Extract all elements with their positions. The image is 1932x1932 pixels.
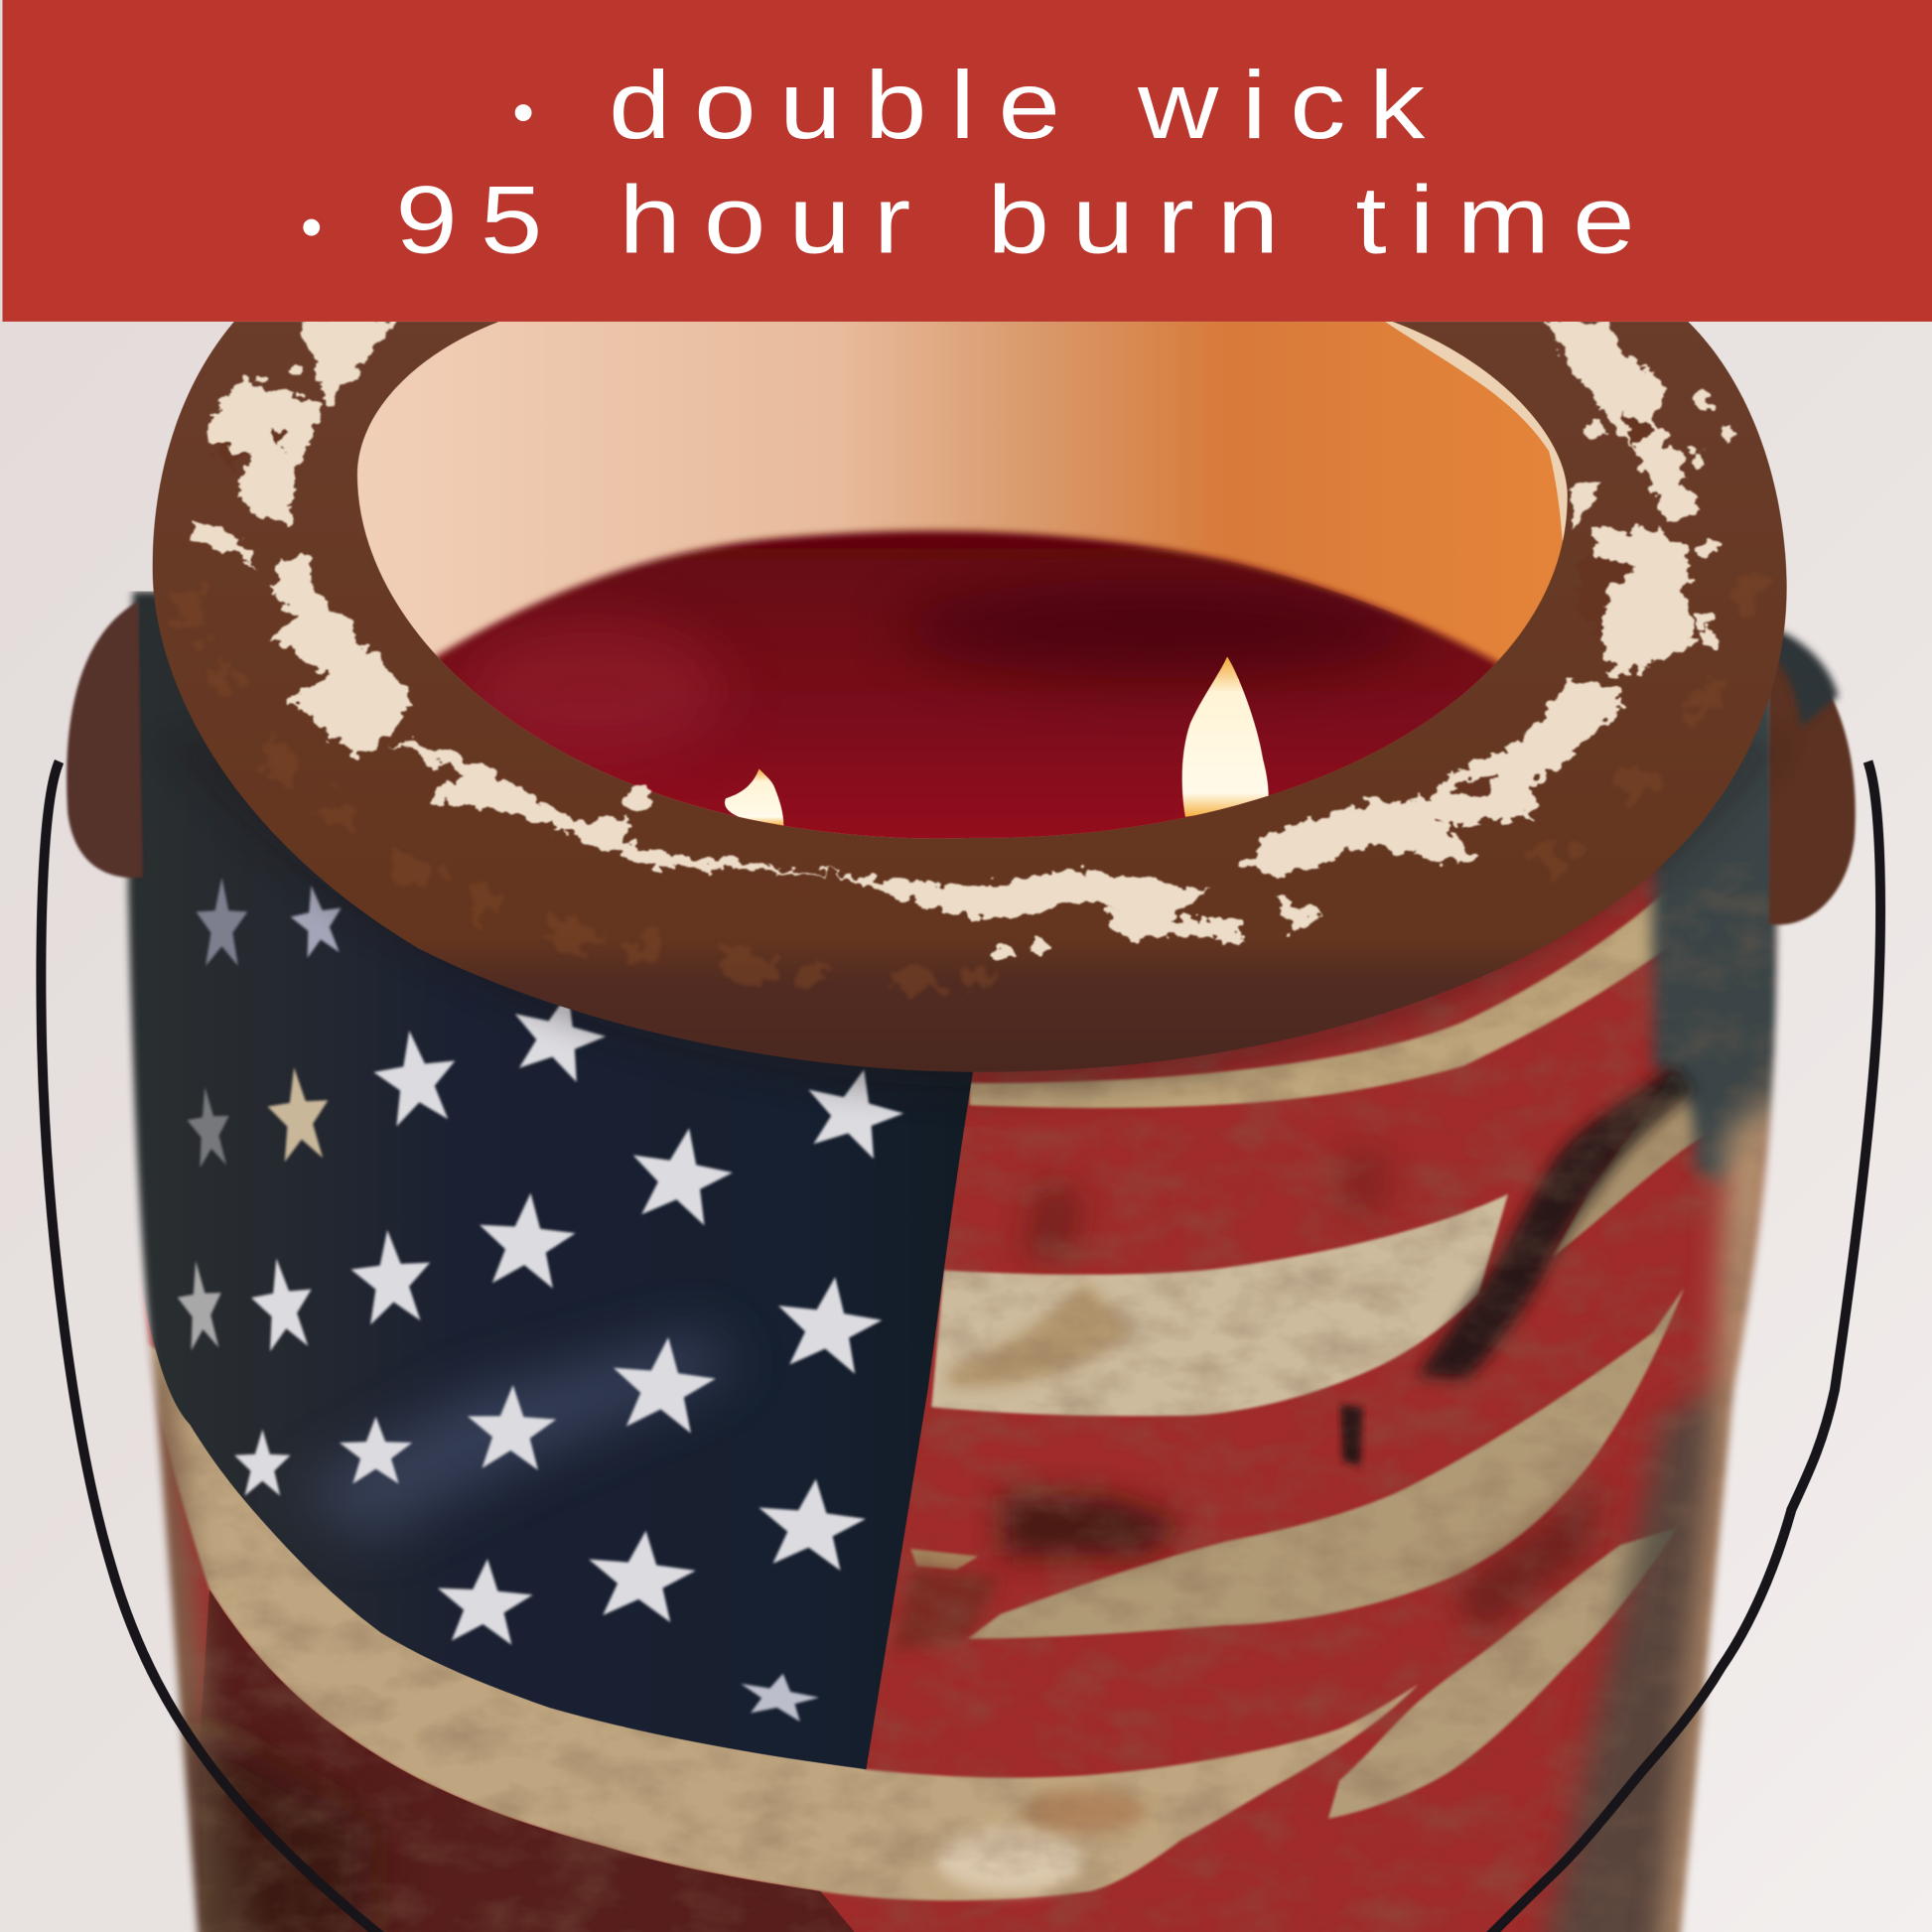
flag stripes group — [145, 880, 1711, 1900]
rim chips — [193, 318, 1734, 960]
heading line 2: 95 hour burn time — [395, 167, 1635, 274]
cream stripe 2 after fold — [1553, 1074, 1711, 1257]
bottom left dark red — [185, 1589, 888, 1932]
marbling on stripe 2 — [949, 1282, 1134, 1387]
right lug dark band — [1769, 628, 1839, 727]
right greenish shadow — [1540, 1380, 1737, 1932]
flame right — [1182, 656, 1269, 817]
tan stub at canton — [910, 1549, 978, 1570]
cream strip lower right — [1328, 1528, 1677, 1819]
canton highlight — [296, 1330, 740, 1540]
wax mottling — [456, 579, 1417, 758]
cream stripe 1 — [970, 880, 1694, 1108]
wire handle left — [41, 761, 394, 1932]
cream stripe 2 — [931, 1194, 1508, 1416]
wall — [357, 322, 1568, 838]
wax surface — [407, 531, 1528, 863]
candle illustration — [41, 318, 1880, 1932]
weathered texture — [111, 863, 1811, 1932]
can body with flag — [111, 592, 1811, 1932]
cream inner edge top right — [1385, 322, 1589, 579]
top banner — [2, 0, 1932, 322]
brown notches over chips — [206, 407, 1651, 890]
bullet line 1: • — [512, 78, 534, 147]
inner candle opening — [357, 322, 1589, 863]
cream stripe 3 — [967, 1288, 1685, 1639]
dark folds — [1417, 1066, 1694, 1380]
bullet line 2: • — [301, 193, 323, 261]
right lug — [1769, 628, 1856, 924]
cream stripe 4 large — [145, 1343, 1418, 1900]
flame left — [725, 768, 783, 826]
wire handle right — [1484, 761, 1880, 1932]
body base — [138, 864, 1779, 1932]
left tan edge — [136, 1330, 265, 1932]
flag canton — [113, 592, 973, 1769]
right tan edge — [1657, 1084, 1787, 1932]
flag stars — [174, 878, 911, 1725]
right grey shoulder — [1651, 592, 1787, 1182]
rim rust mottling — [183, 579, 1749, 980]
bright spot — [936, 1829, 1084, 1892]
rim outer — [153, 322, 1787, 1072]
left lug — [67, 602, 143, 878]
brown patch under stub — [894, 1568, 1001, 1651]
black speck — [1340, 1405, 1363, 1466]
rim shadow — [160, 740, 1787, 1097]
heading line 1: double wick — [609, 52, 1426, 159]
